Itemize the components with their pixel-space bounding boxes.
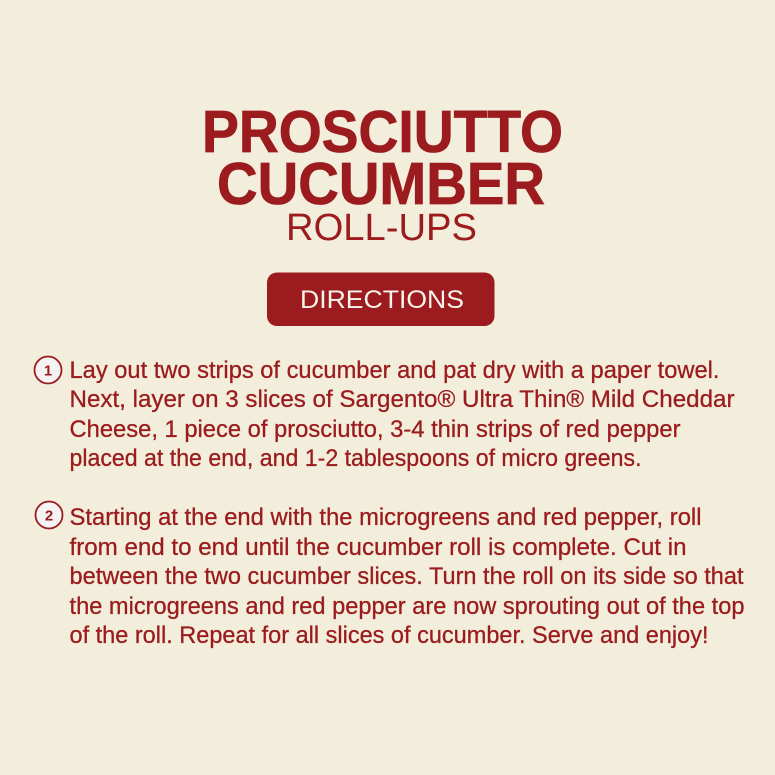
step 1 text — [70, 357, 734, 472]
icon: step number 2 — [36, 502, 62, 528]
icon: step number 2: 2 — [45, 508, 53, 524]
step 2 text: between the two cucumber slices. Turn the roll on its side so that — [70, 563, 744, 590]
icon: step number 1: 1 — [44, 362, 52, 380]
icon: step number 1 — [34, 356, 62, 384]
step 1 text: Cheese, 1 piece of prosciutto, 3-4 thin strips of red pepper — [70, 416, 681, 443]
directions badge: DIRECTIONS — [300, 286, 464, 314]
step 1 — [34, 356, 734, 472]
step 2 text — [70, 504, 744, 649]
step 2 text: of the roll. Repeat for all slices of cucumber. Serve and enjoy! — [70, 622, 708, 649]
step 1 text: Lay out two strips of cucumber and pat dry with a paper towel. — [70, 357, 720, 384]
title — [202, 99, 563, 249]
step 2 — [36, 502, 744, 649]
step 2 text: from end to end until the cucumber roll is complete. Cut in — [70, 534, 686, 561]
step 1 text: Next, layer on 3 slices of Sargento® Ultra Thin® Mild Cheddar — [70, 386, 734, 413]
step 2 text: Starting at the end with the microgreens and red pepper, roll — [70, 504, 702, 531]
step 1 text: placed at the end, and 1-2 tablespoons of micro greens. — [70, 445, 642, 472]
subtitle: roll-ups: ROLL-UPS — [286, 207, 477, 249]
title line: cucumber: CUCUMBER — [217, 151, 545, 217]
title line: prosciutto: PROSCIUTTO — [202, 99, 563, 165]
directions badge — [267, 272, 494, 326]
step 2 text: the microgreens and red pepper are now sprouting out of the top — [70, 593, 744, 620]
